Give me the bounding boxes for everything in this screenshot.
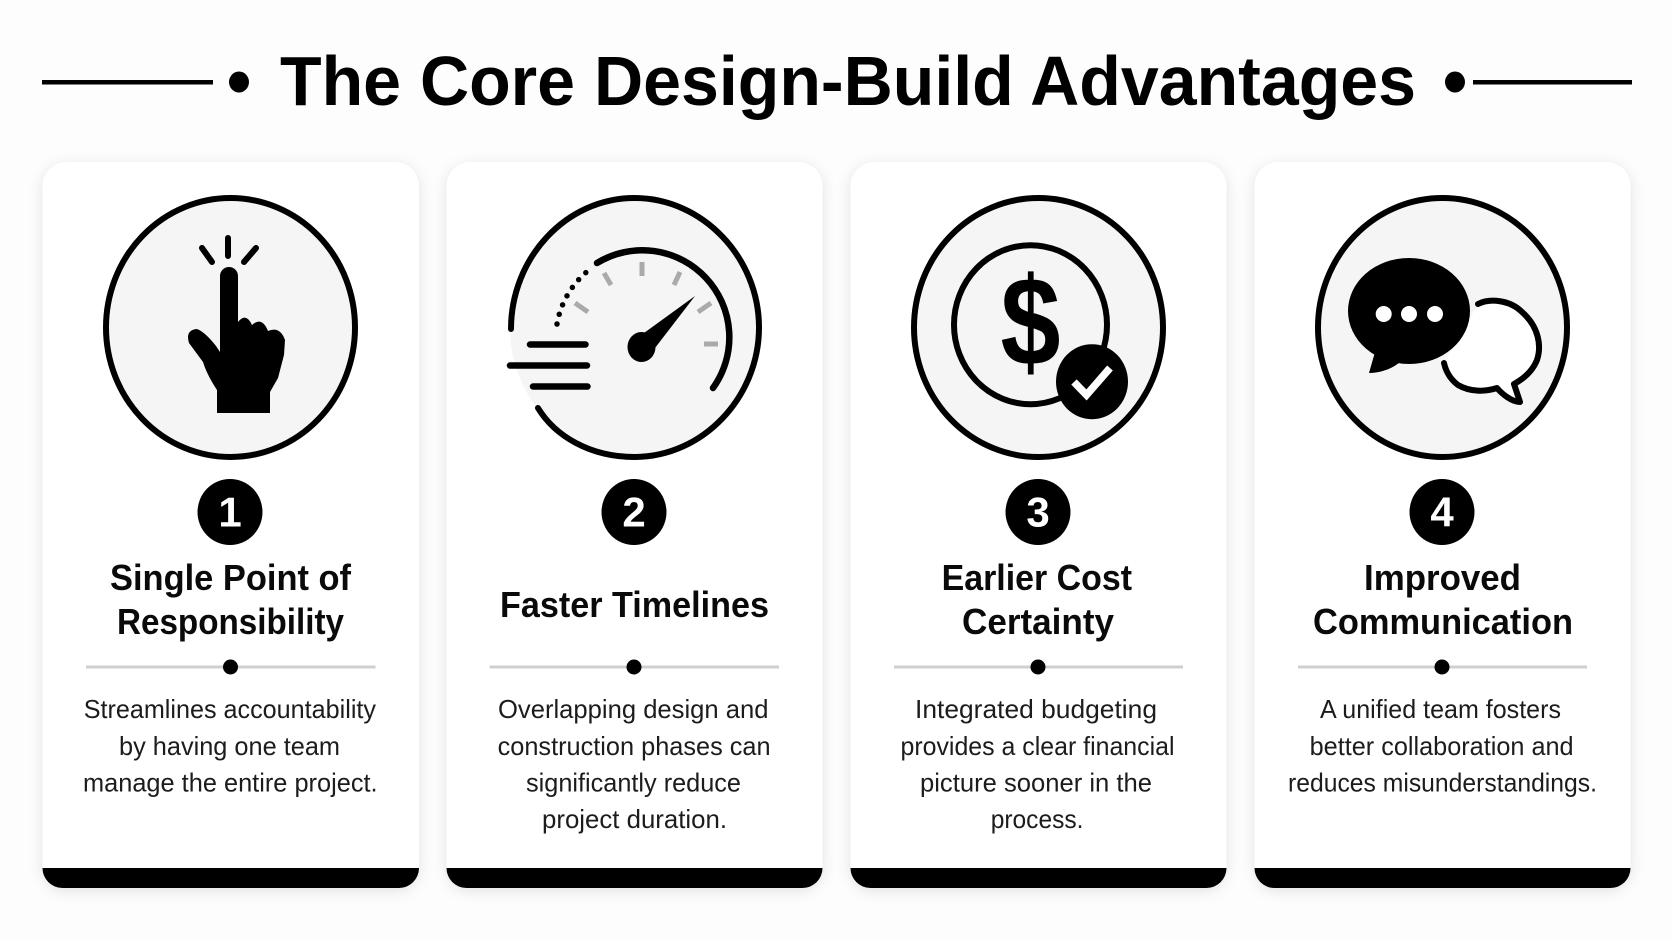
description: manage the entire project. xyxy=(83,768,378,798)
heading xyxy=(1313,557,1573,642)
heading xyxy=(110,557,352,642)
description: A unified team fosters xyxy=(1320,694,1561,724)
description: provides a clear financial xyxy=(900,731,1174,761)
number badge 4: 4 xyxy=(1430,488,1454,536)
icon: speech bubbles xyxy=(1318,198,1567,457)
panel: single point of responsibility xyxy=(42,162,419,888)
number badge 1 xyxy=(198,479,262,545)
heading: Responsibility xyxy=(117,601,344,642)
number badge 3 xyxy=(1006,479,1070,545)
description xyxy=(498,694,771,834)
description: picture sooner in the xyxy=(920,768,1152,798)
description xyxy=(900,694,1174,834)
panel: earlier cost certainty xyxy=(850,162,1226,888)
divider xyxy=(86,660,376,674)
description: reduces misunderstandings. xyxy=(1288,768,1597,798)
panel: faster timelines xyxy=(446,162,822,888)
number badge 3: 3 xyxy=(1026,488,1050,536)
icon: dollar coin with check: $ xyxy=(1000,251,1060,392)
description: project duration. xyxy=(542,804,727,834)
description: Overlapping design and xyxy=(498,694,768,724)
divider xyxy=(894,660,1183,674)
heading: Communication xyxy=(1313,601,1573,642)
description: by having one team xyxy=(119,731,340,761)
number badge 1: 1 xyxy=(218,488,242,536)
panel: improved communication xyxy=(1254,162,1630,888)
heading: Single Point of xyxy=(110,557,352,598)
number badge 2 xyxy=(602,479,666,545)
heading xyxy=(942,557,1132,642)
icon: pointing hand xyxy=(106,198,355,457)
description: process. xyxy=(991,804,1084,834)
heading: Faster Timelines xyxy=(500,584,769,625)
description xyxy=(1288,694,1597,798)
description: Streamlines accountability xyxy=(84,694,376,724)
description: Integrated budgeting xyxy=(915,694,1157,724)
divider xyxy=(490,660,779,674)
description: significantly reduce xyxy=(526,768,741,798)
heading: Certainty xyxy=(962,601,1114,642)
icon: dollar coin with check xyxy=(914,198,1163,457)
description: better collaboration and xyxy=(1310,731,1574,761)
description: construction phases can xyxy=(498,731,771,761)
heading: Improved xyxy=(1364,557,1521,598)
heading: Earlier Cost xyxy=(942,557,1132,598)
number badge 2: 2 xyxy=(622,488,646,536)
divider xyxy=(1298,660,1587,674)
icon: speedometer xyxy=(510,198,759,457)
title: The Core Design-Build Advantages xyxy=(280,42,1416,120)
description xyxy=(83,694,378,798)
number badge 4 xyxy=(1410,479,1474,545)
